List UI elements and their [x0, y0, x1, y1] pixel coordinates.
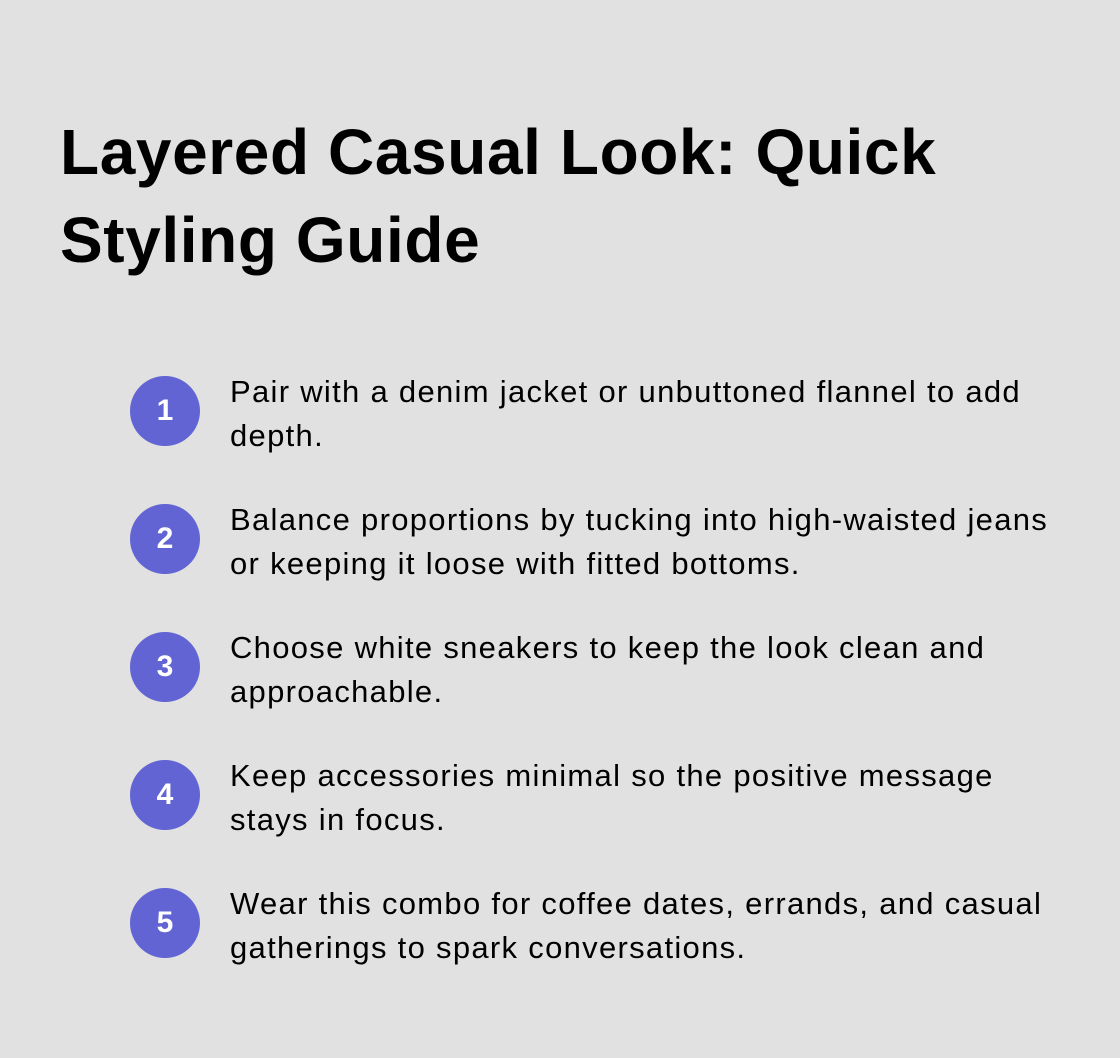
step 3 [130, 630, 985, 709]
number badge 2: 2 [157, 522, 173, 555]
title [60, 116, 936, 276]
step 3 text [230, 630, 985, 709]
step 1 text: depth. [230, 418, 324, 453]
step 5 text: Wear this combo for coffee dates, errands, and casual [230, 886, 1042, 921]
number badge 2 [130, 504, 200, 574]
step 4 text: stays in focus. [230, 802, 446, 837]
number badge 3: 3 [157, 650, 173, 683]
number badge 1 [130, 376, 200, 446]
step 1 text [230, 374, 1021, 453]
step 4 text: Keep accessories minimal so the positive message [230, 758, 994, 793]
step 2 text: or keeping it loose with fitted bottoms. [230, 546, 801, 581]
step 2 [130, 502, 1048, 581]
step 4 [130, 758, 994, 837]
number badge 1: 1 [157, 394, 173, 427]
title: Styling Guide [60, 204, 480, 276]
number badge 3 [130, 632, 200, 702]
step 1 text: Pair with a denim jacket or unbuttoned flannel to add [230, 374, 1021, 409]
step 5 [130, 886, 1042, 965]
number badge 4: 4 [157, 778, 173, 811]
title: Layered Casual Look: Quick [60, 116, 936, 188]
step 2 text: Balance proportions by tucking into high-waisted jeans [230, 502, 1048, 537]
number badge 5 [130, 888, 200, 958]
step 5 text [230, 886, 1042, 965]
number badge 5: 5 [157, 906, 173, 939]
step 3 text: approachable. [230, 674, 443, 709]
step 2 text [230, 502, 1048, 581]
number badge 4 [130, 760, 200, 830]
step 5 text: gatherings to spark conversations. [230, 930, 746, 965]
step 4 text [230, 758, 994, 837]
step 3 text: Choose white sneakers to keep the look clean and [230, 630, 985, 665]
step 1 [130, 374, 1021, 453]
